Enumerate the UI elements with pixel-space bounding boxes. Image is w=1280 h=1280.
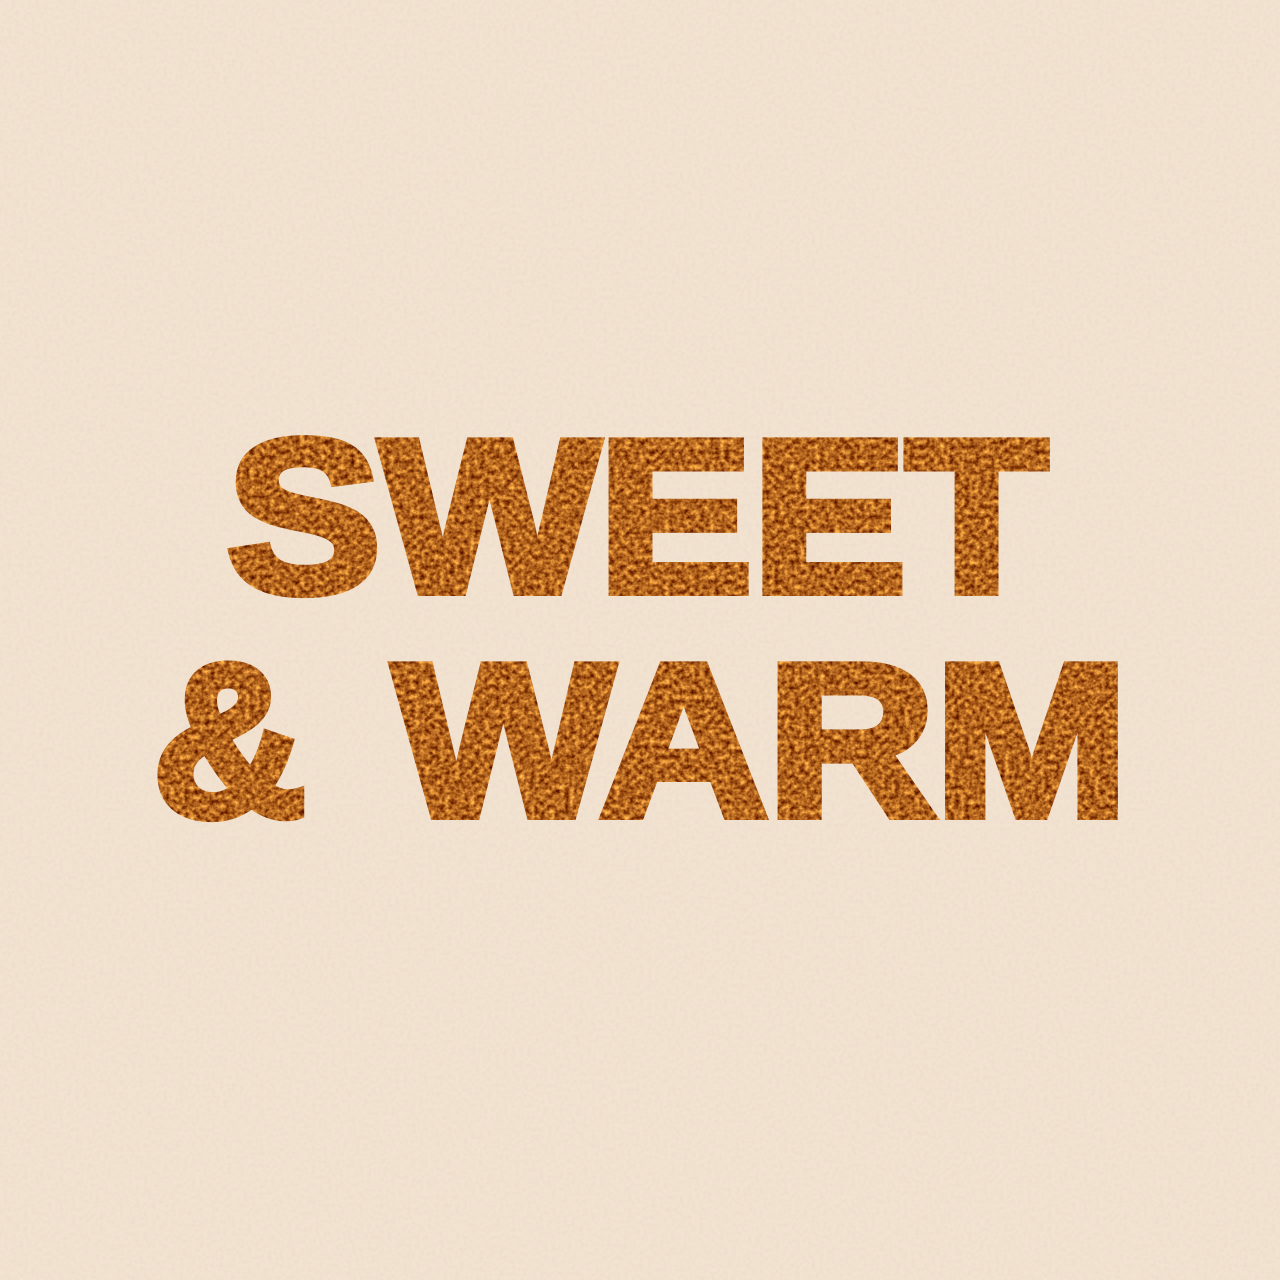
title line 2: WARM: WARM — [394, 619, 1128, 861]
title: Sweet & Warm — [153, 395, 1128, 861]
title line 1: SWEET — [227, 395, 1047, 637]
title line 2: ampersand: & — [153, 619, 306, 861]
